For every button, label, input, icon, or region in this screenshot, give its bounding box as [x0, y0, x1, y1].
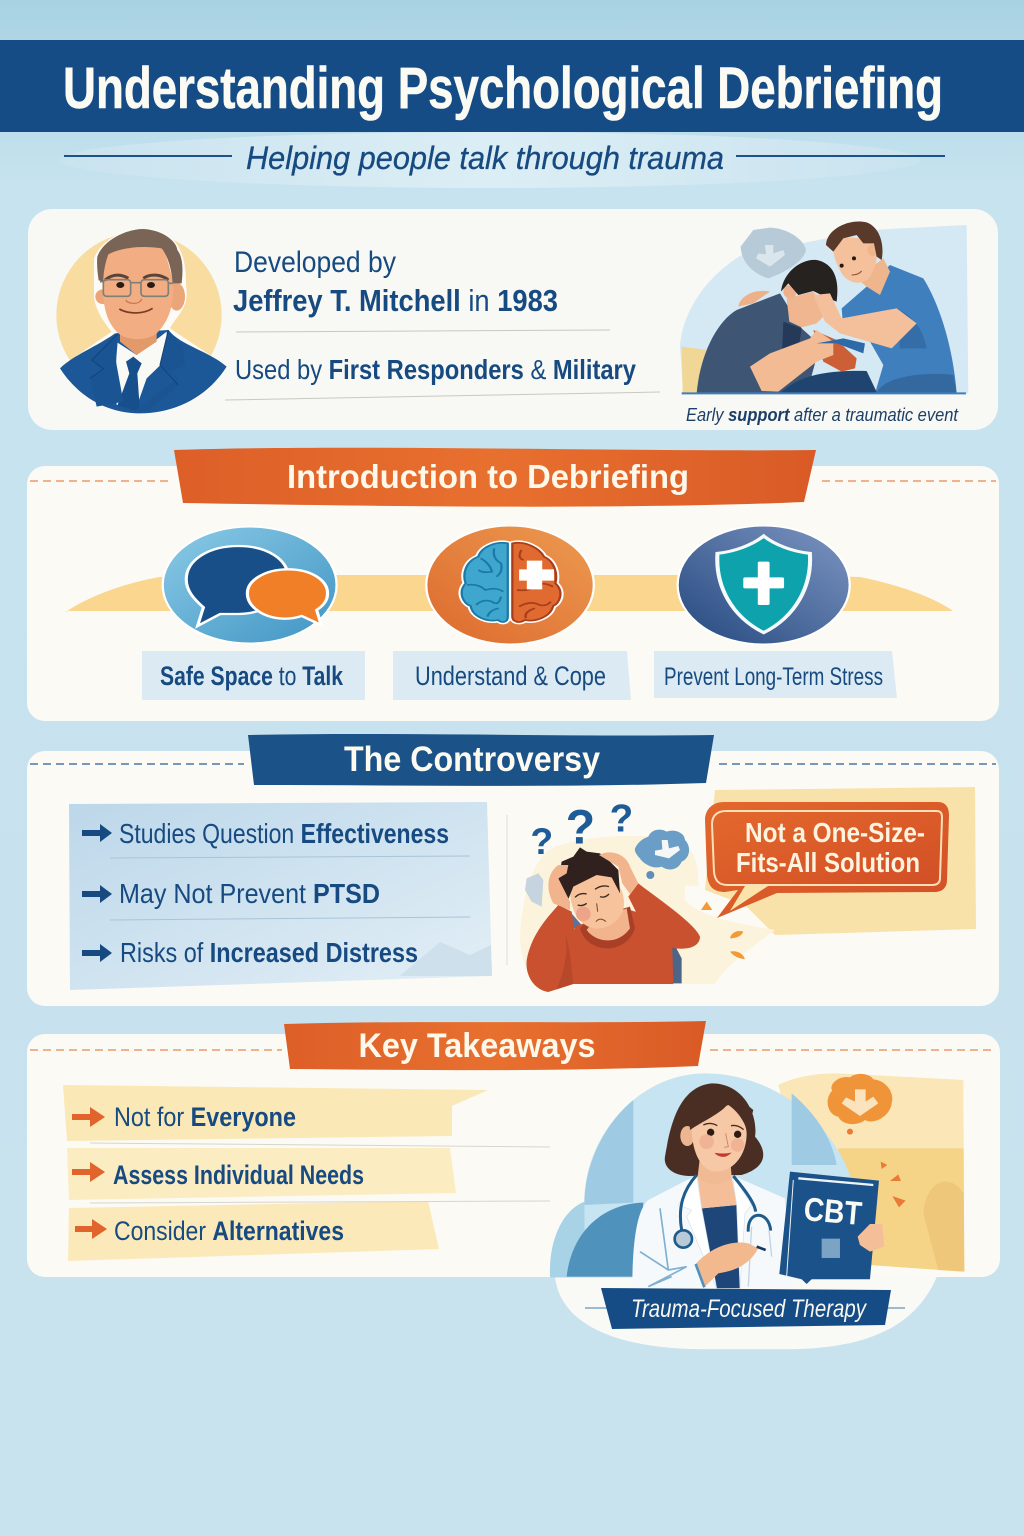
developer text: Jeffrey T. Mitchell in 1983 [233, 283, 558, 318]
icon: brain [426, 526, 594, 644]
illustration: confused person: ? [610, 798, 633, 841]
arrow [72, 1107, 105, 1127]
concern two: May Not Prevent PTSD [119, 878, 380, 909]
developer text: Used by First Responders & Military [235, 354, 636, 385]
concern one: Studies Question Effectiveness [119, 818, 449, 849]
subtitle [60, 132, 945, 188]
concern three: Risks of Increased Distress [120, 937, 418, 968]
book title: CBT: CBT [802, 1190, 863, 1232]
label: prevent long-term stress [654, 651, 897, 698]
yellow backdrop for callout [705, 787, 976, 935]
label: understand and cope [393, 651, 631, 700]
ribbon behind icons [66, 575, 953, 612]
developer text [225, 246, 660, 400]
list: takeaways [63, 1085, 550, 1261]
illustration: confused person [520, 798, 775, 992]
heading: introduction [174, 448, 816, 507]
illustration: early support [680, 221, 968, 425]
panel: introduction [27, 448, 999, 721]
illustration: early support: Early support after a traumatic event [686, 405, 959, 425]
portrait of Jeffrey T. Mitchell [56, 229, 227, 414]
label: prevent long-term stress: Prevent Long-Term Stress [664, 663, 883, 691]
arrow [75, 1219, 107, 1239]
callout: not a one-size-fits-all solution [705, 802, 949, 918]
label: safe space [142, 651, 365, 700]
list: concerns [69, 802, 492, 990]
label: understand and cope: Understand & Cope [415, 661, 606, 691]
callout: not a one-size-fits-all solution: Fits-All Solution [736, 847, 920, 878]
illustration: confused person: ? [530, 820, 553, 862]
arrow [82, 944, 112, 962]
icon: shield [678, 526, 850, 644]
heading: key takeaways: Key Takeaways [358, 1027, 596, 1065]
takeaway three: Consider Alternatives [114, 1216, 344, 1246]
arrow [82, 885, 112, 903]
panel: key takeaways [27, 1021, 1000, 1277]
takeaway one: Not for Everyone [114, 1102, 296, 1132]
label: safe space: Safe Space to Talk [160, 661, 344, 691]
arrow [82, 824, 112, 842]
subtitle: Helping people talk through trauma [246, 140, 724, 176]
icon: speech bubbles [163, 527, 337, 643]
label: trauma-focused therapy [585, 1288, 905, 1329]
heading: key takeaways [284, 1021, 706, 1070]
title banner [0, 40, 1024, 132]
label: trauma-focused therapy: Trauma-Focused Therapy [631, 1295, 867, 1323]
heading: the controversy: The Controversy [344, 740, 600, 779]
panel: the controversy [27, 734, 999, 1006]
takeaway two: Assess Individual Needs [113, 1160, 364, 1190]
heading: introduction: Introduction to Debriefing [287, 458, 689, 495]
developer text: Developed by [234, 246, 396, 279]
panel: developer [28, 209, 998, 430]
heading: the controversy [248, 734, 714, 786]
illustration: confused person: ? [566, 800, 595, 854]
callout: not a one-size-fits-all solution: Not a One-Size- [745, 817, 925, 848]
illustration: therapist with CBT book [550, 1073, 964, 1349]
arrow [72, 1162, 105, 1182]
